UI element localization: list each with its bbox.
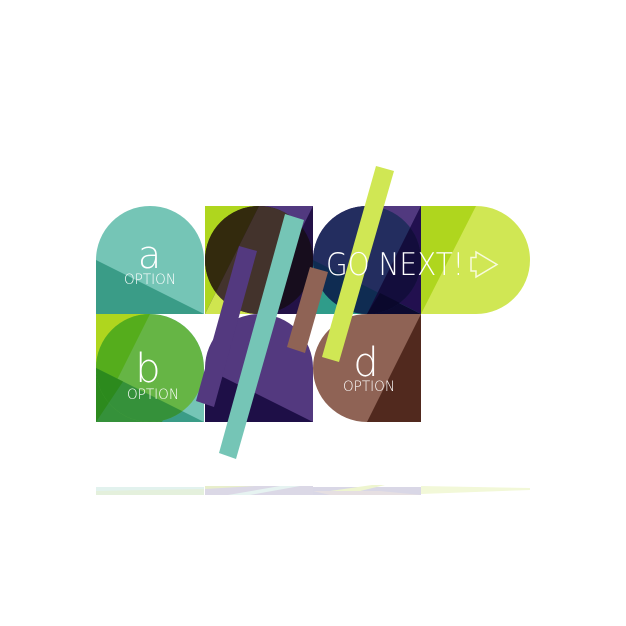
bar: teal — [219, 214, 304, 459]
facet go next — [421, 206, 476, 314]
label d: d — [353, 340, 379, 386]
dark facet c — [205, 376, 313, 422]
bar: brown — [287, 267, 328, 353]
bar: purple — [196, 246, 257, 407]
reflection strip — [96, 485, 530, 495]
label b — [127, 346, 179, 403]
option a: OPTION — [124, 272, 176, 288]
panel: go next — [421, 206, 530, 314]
navy circle — [313, 206, 421, 314]
icon: arrow — [471, 252, 497, 277]
dark circle — [205, 206, 313, 314]
panel: d — [313, 314, 421, 422]
option d: OPTION — [343, 379, 395, 395]
panel: a — [96, 206, 204, 314]
label b: b — [135, 346, 161, 392]
label d — [343, 340, 395, 395]
bar: lime — [322, 166, 394, 362]
panel: circle square — [205, 206, 313, 314]
panel: c — [205, 314, 313, 422]
dark facet a — [96, 260, 204, 314]
panel: navy — [313, 206, 421, 314]
circle b — [96, 314, 204, 422]
label a — [124, 233, 176, 288]
heading: go next: GO NEXT! — [326, 247, 464, 283]
panel: b — [96, 314, 204, 422]
option b: OPTION — [127, 387, 179, 403]
dark facet d — [367, 314, 421, 422]
label a: a — [138, 233, 161, 277]
